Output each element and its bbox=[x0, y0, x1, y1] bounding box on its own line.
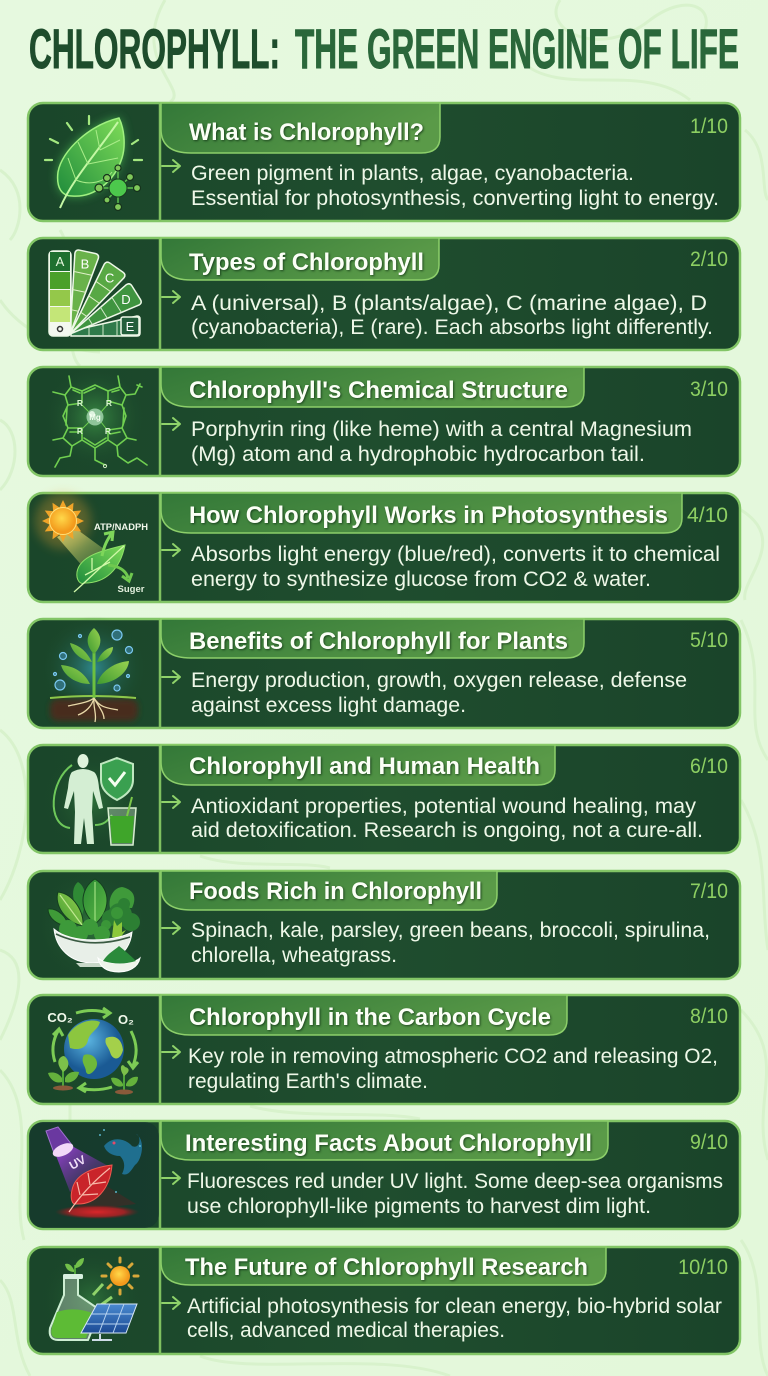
counter 2: 2/10 bbox=[690, 248, 728, 271]
panel: future research bbox=[28, 1247, 740, 1354]
tab: heading 9 bbox=[161, 1121, 608, 1160]
body text 4 bbox=[191, 542, 720, 591]
arrow 5 bbox=[162, 671, 180, 683]
icon: earth with carbon cycle: O₂ bbox=[118, 1012, 134, 1027]
body text 1 bbox=[191, 161, 719, 210]
tab: heading 6: Chlorophyll and Human Health bbox=[189, 753, 540, 780]
arrow 6 bbox=[162, 796, 180, 808]
icon: swatch fan: D bbox=[121, 292, 131, 307]
tab: heading 3 bbox=[161, 367, 584, 407]
arrow 1 bbox=[162, 160, 180, 172]
panel: chemical structure bbox=[28, 367, 740, 476]
body text 7: chlorella, wheatgrass. bbox=[191, 943, 397, 967]
tab: heading 1 bbox=[161, 103, 440, 153]
icon: UV lamp on red leaf and fish: UV bbox=[67, 1152, 88, 1173]
icon: swatch fan: A bbox=[56, 254, 65, 269]
icon: plant with roots bbox=[42, 616, 146, 722]
body text 2: A (universal), B (plants/algae), C (marine algae), D bbox=[191, 291, 707, 315]
body text 1: Essential for photosynthesis, converting light to energy. bbox=[191, 186, 719, 210]
icon: porphyrin ring molecule: R bbox=[105, 426, 111, 436]
body text 3: (Mg) atom and a hydrophobic hydrocarbon tail. bbox=[191, 442, 645, 466]
tab: heading 2: Types of Chlorophyll bbox=[189, 249, 424, 276]
arrow 10 bbox=[162, 1297, 180, 1309]
tab: heading 8: Chlorophyll in the Carbon Cycle bbox=[189, 1004, 551, 1031]
tab: heading 5: Benefits of Chlorophyll for Plants bbox=[189, 628, 568, 655]
icon: porphyrin ring molecule bbox=[45, 367, 147, 468]
icon: swatch fan: B bbox=[81, 257, 89, 272]
body text 6: aid detoxification. Research is ongoing, not a cure-all. bbox=[191, 818, 703, 842]
body text 5: Energy production, growth, oxygen release, defense bbox=[191, 668, 687, 692]
icon: glowing leaf with molecule bbox=[45, 116, 142, 210]
body text 10 bbox=[187, 1294, 722, 1342]
body text 5: against excess light damage. bbox=[191, 693, 466, 717]
body text 7 bbox=[191, 918, 710, 967]
icon: bowl of greens bbox=[38, 871, 146, 979]
icon: porphyrin ring molecule: Mg bbox=[89, 413, 101, 422]
body text 1: Green pigment in plants, algae, cyanobacteria. bbox=[191, 161, 634, 185]
body text 8 bbox=[188, 1044, 718, 1093]
tab: heading 2 bbox=[161, 238, 439, 280]
counter 10: 10/10 bbox=[678, 1256, 728, 1279]
body text 6: Antioxidant properties, potential wound healing, may bbox=[191, 794, 696, 818]
body text 5 bbox=[191, 668, 687, 717]
panel: types of chlorophyll bbox=[28, 238, 740, 350]
title bbox=[29, 17, 739, 80]
panel: human health bbox=[28, 745, 740, 853]
tab: heading 6 bbox=[161, 745, 555, 785]
arrow 4 bbox=[162, 544, 180, 556]
icon: porphyrin ring molecule: R bbox=[106, 398, 112, 408]
arrow 9 bbox=[162, 1172, 180, 1184]
icon: human, shield and green juice bbox=[44, 752, 140, 848]
body text 2: (cyanobacteria), E (rare). Each absorbs light differently. bbox=[191, 315, 713, 339]
body text 10: Artificial photosynthesis for clean energy, bio-hybrid solar bbox=[187, 1294, 722, 1318]
icon: swatch fan: E bbox=[126, 319, 135, 334]
body text 3 bbox=[191, 417, 692, 466]
icon: earth with carbon cycle: CO₂ bbox=[47, 1010, 73, 1025]
tab: heading 7 bbox=[161, 871, 497, 910]
counter 7: 7/10 bbox=[690, 880, 728, 903]
tab: heading 10 bbox=[161, 1247, 606, 1285]
tab: heading 9: Interesting Facts About Chlorophyll bbox=[185, 1130, 592, 1157]
icon: porphyrin ring molecule: R bbox=[77, 426, 83, 436]
body text 9: use chlorophyll-like pigments to harvest dim light. bbox=[187, 1194, 651, 1218]
icon: earth with carbon cycle bbox=[47, 1008, 138, 1094]
body text 9: Fluoresces red under UV light. Some deep-sea organisms bbox=[187, 1169, 723, 1193]
icon: UV lamp on red leaf and fish bbox=[29, 1122, 159, 1228]
icon: sun and leaf bbox=[35, 493, 148, 595]
counter 4: 4/10 bbox=[687, 504, 728, 527]
tab: heading 1: What is Chlorophyll? bbox=[189, 119, 424, 146]
counter 8: 8/10 bbox=[690, 1005, 728, 1028]
panel: how chlorophyll works bbox=[28, 493, 740, 602]
panel: what is chlorophyll bbox=[28, 103, 740, 221]
counter 9: 9/10 bbox=[690, 1131, 728, 1154]
panel: benefits for plants bbox=[28, 616, 740, 728]
title: CHLOROPHYLL: bbox=[29, 17, 280, 80]
body text 2 bbox=[191, 291, 713, 339]
body text 8: Key role in removing atmospheric CO2 and releasing O2, bbox=[188, 1044, 718, 1068]
icon: porphyrin ring molecule: R bbox=[77, 398, 83, 408]
tab: heading 7: Foods Rich in Chlorophyll bbox=[189, 878, 482, 905]
arrow 2 bbox=[162, 291, 180, 303]
body text 4: energy to synthesize glucose from CO2 & water. bbox=[191, 567, 651, 591]
panel: interesting facts bbox=[28, 1121, 740, 1229]
icon: flask, sun and solar panel bbox=[42, 1250, 142, 1350]
tab: heading 4 bbox=[161, 493, 682, 533]
body text 8: regulating Earth's climate. bbox=[188, 1069, 428, 1093]
arrow 7 bbox=[162, 922, 180, 934]
tab: heading 10: The Future of Chlorophyll Research bbox=[185, 1254, 588, 1281]
body text 9 bbox=[187, 1169, 723, 1218]
body text 10: cells, advanced medical therapies. bbox=[187, 1318, 505, 1342]
icon: sun and leaf: ATP/NADPH bbox=[94, 522, 148, 533]
counter 1: 1/10 bbox=[690, 115, 728, 138]
arrow 8 bbox=[162, 1046, 180, 1058]
tab: heading 3: Chlorophyll's Chemical Structure bbox=[189, 377, 568, 404]
counter 3: 3/10 bbox=[690, 378, 728, 401]
tab: heading 8 bbox=[161, 995, 567, 1035]
body text 4: Absorbs light energy (blue/red), converts it to chemical bbox=[191, 542, 720, 566]
body text 3: Porphyrin ring (like heme) with a central Magnesium bbox=[191, 417, 692, 441]
icon: sun and leaf: Suger bbox=[118, 584, 145, 595]
panel: carbon cycle bbox=[28, 995, 740, 1104]
counter 5: 5/10 bbox=[690, 629, 728, 652]
body text 7: Spinach, kale, parsley, green beans, broccoli, spirulina, bbox=[191, 918, 710, 942]
icon: swatch fan: C bbox=[105, 270, 114, 285]
counter 6: 6/10 bbox=[690, 755, 728, 778]
panel: foods rich in chlorophyll bbox=[28, 871, 740, 979]
icon: swatch fan bbox=[49, 249, 143, 344]
tab: heading 5 bbox=[161, 619, 584, 658]
body text 6 bbox=[191, 794, 703, 842]
tab: heading 4: How Chlorophyll Works in Photosynthesis bbox=[189, 502, 668, 529]
arrow 3 bbox=[162, 418, 180, 430]
